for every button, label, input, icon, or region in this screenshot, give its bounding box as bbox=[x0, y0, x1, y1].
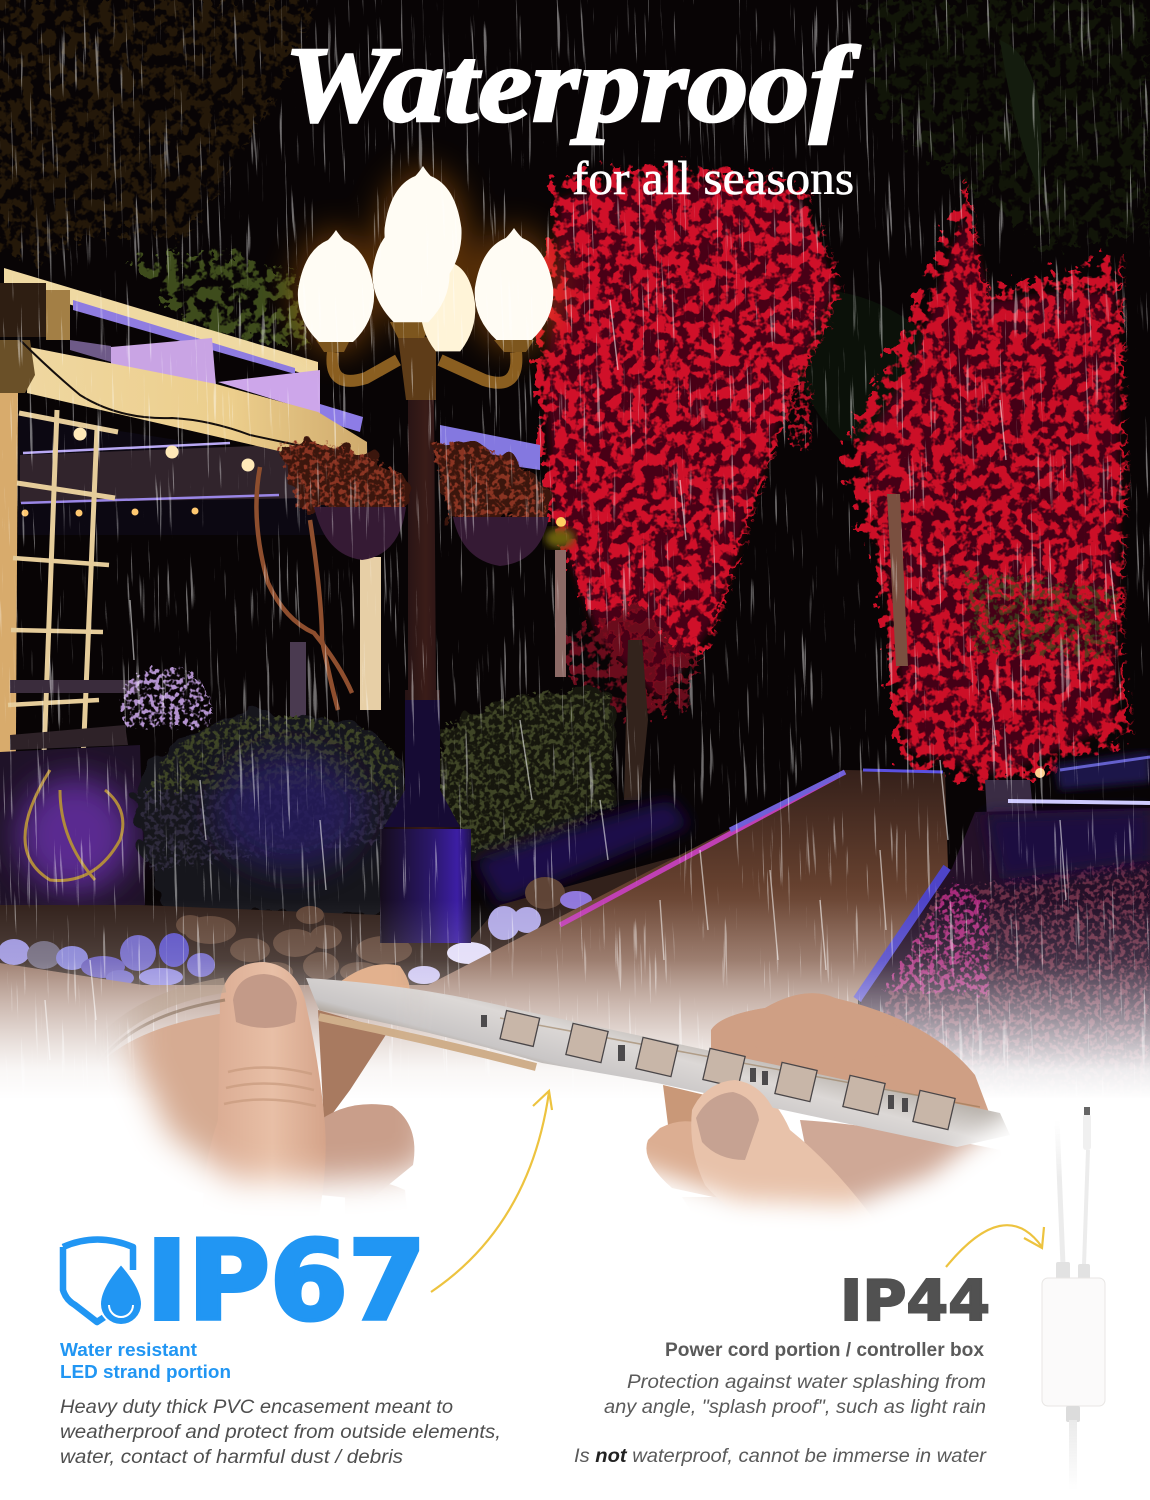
arrow: IP67 to strip bbox=[431, 1091, 552, 1292]
lower finger bbox=[646, 1121, 716, 1197]
IP67 description: water, contact of harmful dust / debris bbox=[60, 1447, 404, 1468]
icon: shield with water drop bbox=[63, 1240, 142, 1325]
white fade into lower section bbox=[0, 900, 1150, 1100]
controller box with cables bbox=[1042, 1107, 1105, 1490]
lit edge of walkway bbox=[560, 772, 954, 1000]
controller body bbox=[1042, 1278, 1105, 1406]
pergola main beam bbox=[27, 347, 367, 466]
second finger behind bbox=[318, 1010, 386, 1118]
left shrub bbox=[136, 714, 402, 915]
lower thumb bbox=[691, 1093, 863, 1218]
upper finger tip over strip bbox=[748, 996, 834, 1012]
right garden bed bbox=[820, 752, 1150, 1100]
street lamp bbox=[294, 166, 558, 943]
left basket plants bbox=[278, 443, 406, 510]
cable strain reliefs bbox=[1056, 1262, 1090, 1279]
trellis base vines bbox=[25, 770, 123, 880]
lamp base drum bbox=[380, 829, 471, 943]
stone garden bed bbox=[0, 850, 700, 986]
right hand bbox=[646, 996, 992, 1219]
rain streaks layer bbox=[0, 0, 1150, 1127]
pergola capital bbox=[0, 340, 35, 393]
vine branches bbox=[256, 467, 352, 710]
connector bbox=[1083, 1107, 1091, 1150]
thumb nail bbox=[233, 974, 297, 1028]
pergola ceiling bbox=[18, 415, 367, 535]
lamp cups bbox=[316, 322, 534, 352]
IP44 description: any angle, "splash proof", such as light rain bbox=[604, 1397, 986, 1418]
resistors bbox=[481, 1015, 908, 1112]
knuckle creases bbox=[224, 1067, 316, 1106]
IP67 subtitle: Water resistant bbox=[60, 1339, 197, 1360]
pergola rafter box end bbox=[0, 283, 70, 340]
pergola upper rafter bbox=[4, 268, 318, 378]
gold mesh bbox=[319, 1017, 536, 1067]
title bbox=[284, 26, 860, 205]
thumb bbox=[220, 962, 326, 1202]
strip body bbox=[306, 978, 1010, 1147]
thumb over strip bbox=[704, 1080, 772, 1108]
string lights bbox=[20, 340, 575, 548]
power cable bbox=[1066, 1406, 1080, 1422]
right basket bbox=[453, 517, 549, 566]
panel: IP44 bbox=[574, 1269, 990, 1467]
panel: IP67 bbox=[60, 1217, 501, 1468]
lower tip finger bbox=[686, 1197, 734, 1212]
IP44 description bbox=[574, 1372, 987, 1467]
lamp head bbox=[398, 337, 436, 400]
IP67 description: weatherproof and protect from outside elements, bbox=[60, 1422, 501, 1443]
left basket bbox=[314, 507, 406, 560]
LED chips bbox=[500, 1011, 955, 1130]
lamp neck bbox=[384, 700, 460, 827]
lamp glow bbox=[294, 168, 558, 354]
subheading: for all seasons bbox=[572, 152, 854, 205]
palm bbox=[800, 1120, 992, 1214]
cables bbox=[1057, 1120, 1063, 1265]
trellis bbox=[4, 410, 118, 880]
white lower section bbox=[0, 1098, 1150, 1500]
shrubs bbox=[136, 692, 690, 915]
lamp globes bbox=[298, 166, 553, 351]
IP67 subtitle bbox=[60, 1339, 231, 1382]
red flowering tree: center bbox=[538, 165, 845, 720]
foliage: top right leaves bbox=[780, 0, 1150, 445]
arrow: IP44 to controller bbox=[946, 1225, 1044, 1267]
IP67 description: Heavy duty thick PVC encasement meant to bbox=[60, 1397, 453, 1418]
coil bbox=[122, 978, 226, 1034]
LED strip bbox=[89, 978, 1010, 1147]
photo: hands holding LED strip bbox=[115, 962, 1008, 1219]
lower finger bbox=[322, 1104, 414, 1198]
bright rain drops bbox=[45, 300, 1116, 1060]
thumb nail over strip bbox=[696, 1092, 759, 1160]
pergola posts bbox=[0, 393, 566, 915]
heading: Waterproof: Waterproof bbox=[284, 26, 860, 145]
right basket plants bbox=[432, 443, 548, 518]
IP44 subtitle: Power cord portion / controller box bbox=[665, 1340, 984, 1361]
IP44 description: Protection against water splashing from bbox=[627, 1372, 986, 1393]
lamp arms bbox=[332, 352, 516, 383]
left hand bbox=[116, 962, 414, 1202]
small finger behind bbox=[345, 1184, 405, 1200]
lamp column bbox=[380, 400, 471, 943]
IP67 label: IP67 bbox=[146, 1217, 426, 1345]
hanging baskets bbox=[278, 443, 549, 566]
IP44 label: IP44 bbox=[840, 1269, 990, 1334]
left ground purple bbox=[0, 745, 145, 945]
tree trunks bbox=[624, 494, 1042, 912]
walkway bbox=[0, 770, 948, 1100]
dark red flower cluster by leaf bbox=[784, 380, 815, 450]
right shrub bbox=[442, 692, 615, 860]
IP44 description: Is not waterproof, cannot be immerse in water bbox=[574, 1446, 987, 1467]
IP67 description bbox=[60, 1397, 501, 1468]
IP67 subtitle: LED strand portion bbox=[60, 1361, 231, 1382]
red flowering tree: right bbox=[842, 180, 1135, 790]
night garden photo background bbox=[0, 0, 1150, 1127]
lower cable bbox=[1069, 1420, 1077, 1490]
index fingertip bbox=[336, 964, 410, 1000]
foliage: top left leaves bbox=[0, 0, 320, 350]
lavender rocks bbox=[0, 891, 592, 986]
palm behind bbox=[116, 1014, 220, 1184]
brown rocks bbox=[176, 877, 565, 982]
garden bench and table bbox=[10, 642, 306, 750]
finger behind strip bbox=[663, 1085, 702, 1124]
lavender blocks bbox=[70, 338, 540, 470]
upper finger bbox=[711, 993, 990, 1115]
